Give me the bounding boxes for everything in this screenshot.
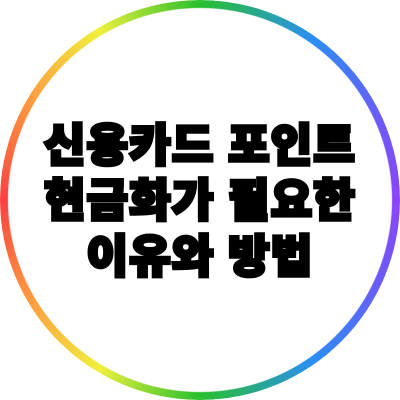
title: 신용카드 포인트: [44, 120, 356, 170]
title: [42, 120, 356, 282]
title: 이유와 방법: [87, 230, 313, 282]
title: 현금화가 필요한: [44, 175, 356, 226]
